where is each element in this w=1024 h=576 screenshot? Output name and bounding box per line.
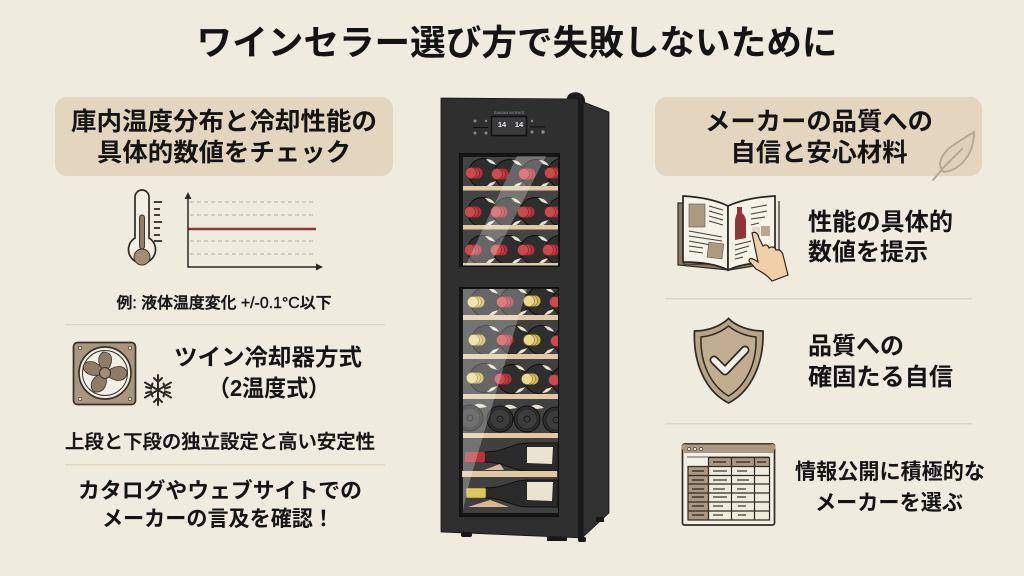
text: confidence in quality	[808, 333, 953, 391]
text: example value: 例: 液体温度変化 +/-0.1°C以下	[116, 294, 332, 312]
icon: shield with check	[694, 318, 763, 403]
upper bottles	[464, 158, 558, 263]
heading: twin cooler: （2温度式）	[208, 375, 330, 401]
heading: temperature distribution	[55, 97, 393, 176]
text: confidence in quality: 品質への	[808, 333, 904, 360]
horizontal bottle: red capsule	[465, 443, 558, 471]
heading: maker confidence: メーカーの品質への	[705, 108, 933, 136]
heading: twin cooler: ツイン冷却器方式	[174, 344, 362, 370]
glass reflection	[466, 156, 546, 265]
glass reflection	[463, 289, 527, 510]
text: check catalog: メーカーの言及を確認！	[102, 507, 334, 531]
text: independent settings: 上段と下段の独立設定と高い安定性	[65, 431, 375, 453]
control panel: SAVIAN WORKS	[494, 110, 525, 115]
text: choose open makers: 情報公開に積極的な	[795, 460, 985, 484]
heading: temperature distribution: 具体的数値をチェック	[97, 139, 351, 167]
cabinet body	[441, 92, 609, 542]
icon: snowflake	[145, 375, 171, 405]
horizontal bottle: gold capsule	[466, 480, 558, 507]
illustration: wine cellar	[441, 92, 609, 542]
icon: leaf	[933, 132, 974, 180]
upper shelves	[463, 186, 558, 266]
heading: maker confidence	[655, 97, 982, 176]
lower shelves	[462, 315, 558, 477]
panel: left column	[55, 97, 393, 531]
icon: spec table window	[681, 444, 776, 525]
chart: stable temperature line	[184, 192, 323, 270]
text: confidence in quality: 確固たる自信	[808, 364, 953, 391]
icon: open catalog with hand	[678, 196, 788, 281]
lower wine compartment	[459, 287, 559, 517]
heading: twin cooler	[174, 344, 362, 401]
control panel	[473, 110, 545, 136]
text: choose open makers	[795, 460, 985, 515]
control panel: 14	[515, 120, 524, 129]
heading: maker confidence: 自信と安心材料	[730, 139, 908, 167]
text: check catalog: カタログやウェブサイトでの	[78, 478, 362, 503]
heading: temperature distribution: 庫内温度分布と冷却性能の	[71, 108, 377, 136]
text: concrete values: 数値を提示	[808, 239, 928, 266]
text: check catalog	[78, 478, 362, 531]
text: concrete values: 性能の具体的	[808, 209, 953, 236]
control panel: 14	[498, 120, 507, 129]
panel: right column	[655, 97, 985, 525]
icon: cooling fan	[74, 342, 136, 404]
icon: thermometer	[128, 190, 162, 265]
title: ワインセラー選び方で失敗しないために	[196, 24, 838, 63]
text: choose open makers: メーカーを選ぶ	[815, 491, 963, 515]
text: concrete values	[808, 209, 953, 266]
upper wine compartment	[459, 153, 560, 267]
lower bottles	[463, 289, 558, 433]
